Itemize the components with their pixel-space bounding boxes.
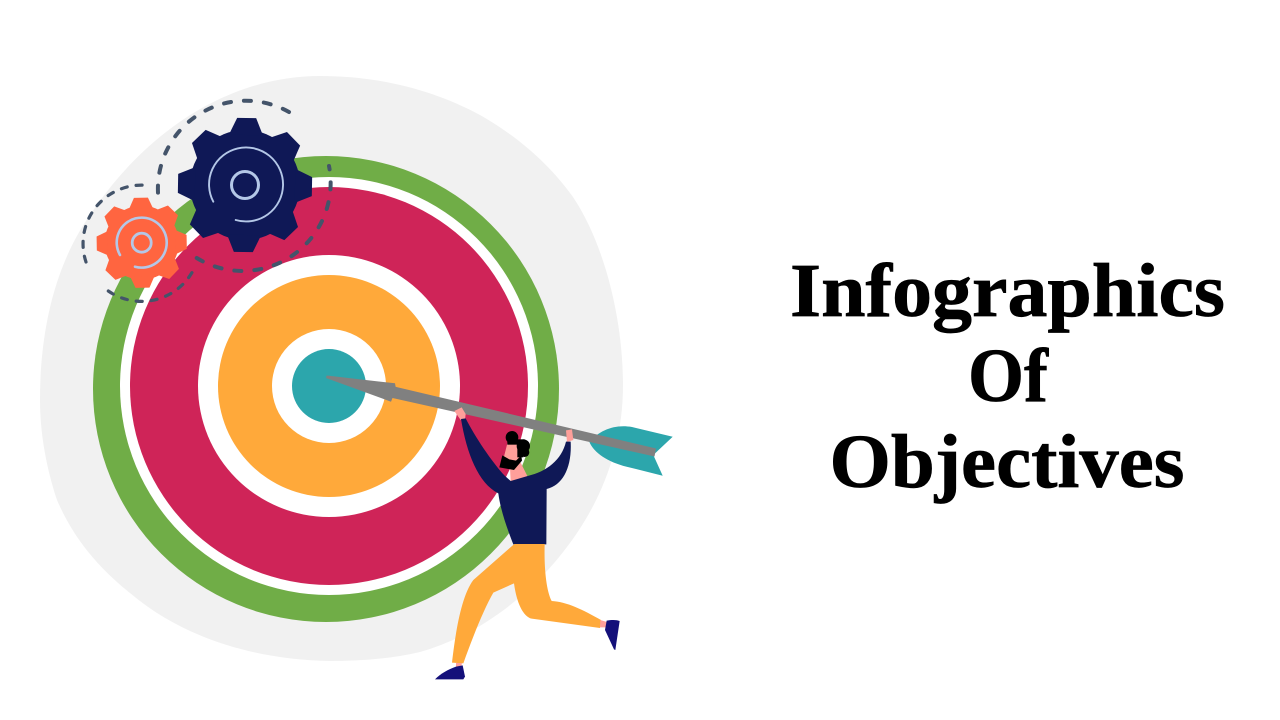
hair (506, 431, 530, 457)
arrow (326, 376, 673, 476)
background blob (40, 76, 623, 661)
arrow shaft (388, 386, 656, 456)
shoes (435, 620, 620, 679)
arrow fletching (589, 426, 673, 476)
title line 1: Infographics (790, 249, 1225, 333)
trousers (452, 544, 601, 663)
title line 2: Of (968, 334, 1050, 418)
icon: small orange gear (96, 197, 187, 288)
small dashed orbit (83, 185, 195, 301)
ankles (456, 620, 609, 668)
title (790, 249, 1225, 504)
icon: large navy gear (178, 118, 312, 252)
neck and face (504, 443, 528, 481)
large dashed orbit (158, 101, 331, 271)
back hand (454, 407, 466, 420)
front hand (566, 429, 573, 442)
target rings (93, 156, 559, 622)
arrow head (326, 376, 396, 402)
sweater (461, 418, 571, 544)
title line 3: Objectives (830, 420, 1184, 504)
person holding arrow (435, 407, 620, 679)
beard (499, 455, 522, 470)
